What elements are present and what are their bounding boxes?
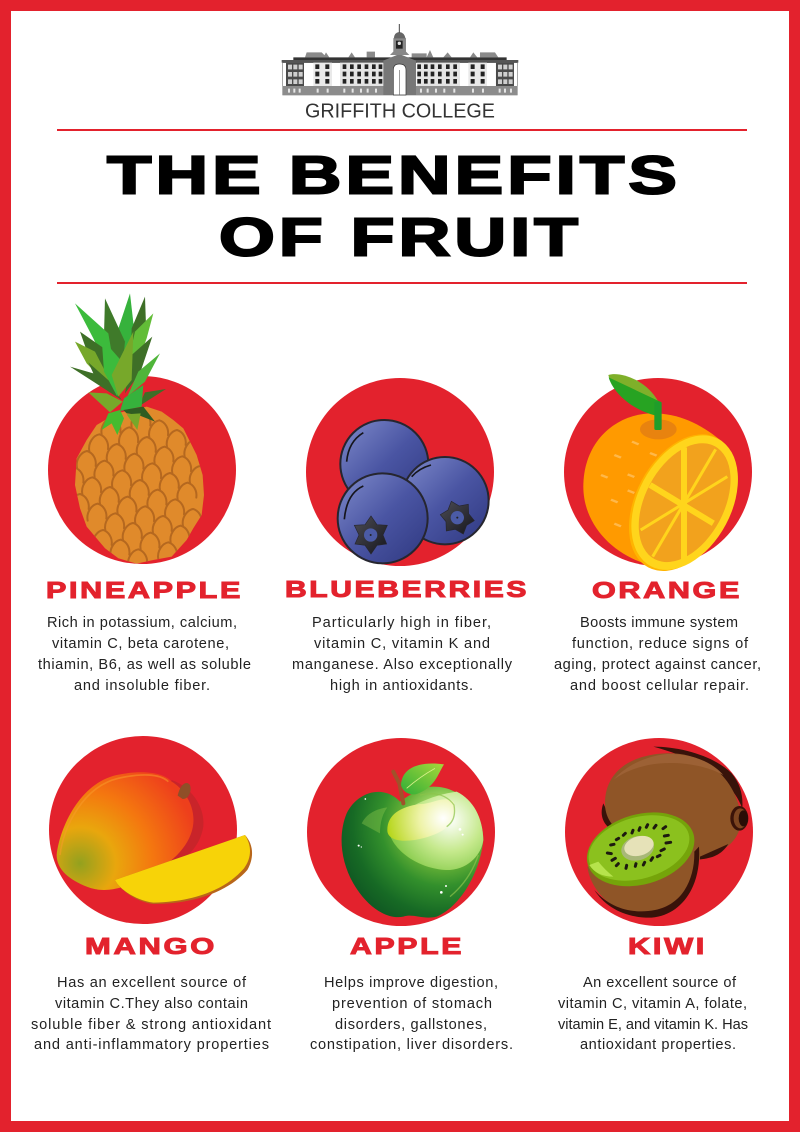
text: apple: prevention of stomach	[332, 996, 492, 1012]
bottom rule	[57, 282, 747, 284]
panel: blueberries	[306, 378, 494, 566]
panel: apple	[307, 738, 495, 926]
text: orange: Boosts immune system	[580, 615, 738, 631]
title: THE BENEFITS	[107, 146, 681, 206]
text: mango: Has an excellent source of	[57, 975, 247, 991]
red circle: orange	[564, 378, 752, 566]
text: orange: function, reduce signs of	[572, 636, 749, 652]
red circle: apple	[307, 738, 495, 926]
text: orange: aging, protect against cancer,	[554, 657, 761, 673]
text: pineapple: and insoluble fiber.	[74, 678, 210, 694]
text: kiwi: An excellent source of	[583, 975, 737, 991]
red circle: pineapple	[48, 376, 236, 564]
title	[107, 146, 681, 268]
text: apple: constipation, liver disorders.	[310, 1037, 513, 1053]
panel: mango	[49, 736, 252, 924]
logo: Griffith College	[282, 24, 518, 123]
icon: mango	[57, 772, 252, 904]
red circle: mango	[49, 736, 237, 924]
text: blueberries	[292, 615, 513, 694]
text: blueberries: high in antioxidants.	[330, 678, 473, 694]
text: mango	[31, 975, 271, 1053]
text: apple: Helps improve digestion,	[324, 975, 498, 991]
icon: college building	[282, 24, 518, 95]
text: pineapple	[38, 615, 251, 694]
text: apple	[310, 975, 513, 1053]
panel: kiwi	[565, 738, 753, 926]
heading: mango: MANGO	[85, 933, 217, 959]
heading: kiwi: KIWI	[628, 933, 707, 959]
text: kiwi: antioxidant properties.	[580, 1037, 736, 1053]
text: mango: and anti-inflammatory properties	[34, 1037, 269, 1053]
text: blueberries: vitamin C, vitamin K and	[314, 636, 490, 652]
text: kiwi	[558, 975, 748, 1053]
title: OF FRUIT	[219, 208, 582, 268]
text: blueberries: Particularly high in fiber,	[312, 615, 491, 631]
panel: pineapple	[48, 293, 236, 566]
panel: orange	[564, 374, 760, 589]
text: orange	[554, 615, 761, 694]
heading: orange: ORANGE	[592, 577, 742, 603]
icon: blueberries	[338, 420, 489, 563]
text: pineapple: Rich in potassium, calcium,	[47, 615, 237, 631]
red circle: kiwi	[565, 738, 753, 926]
heading: apple: APPLE	[350, 933, 464, 959]
text: kiwi: vitamin C, vitamin A, folate,	[558, 996, 747, 1012]
heading: blueberries: BLUEBERRIES	[285, 576, 529, 602]
icon: apple	[342, 763, 483, 918]
icon: orange	[583, 374, 760, 589]
text: pineapple: thiamin, B6, as well as soluble	[38, 657, 251, 673]
top rule	[57, 129, 747, 131]
text: orange: and boost cellular repair.	[570, 678, 749, 694]
icon: pineapple	[64, 293, 209, 566]
heading: pineapple: PINEAPPLE	[46, 577, 243, 603]
text: kiwi: vitamin E, and vitamin K. Has	[558, 1017, 748, 1033]
text: mango: soluble fiber & strong antioxidant	[31, 1017, 271, 1033]
icon: kiwi	[578, 747, 748, 918]
logo wordmark: GRIFFITH COLLEGE	[305, 100, 495, 122]
text: apple: disorders, gallstones,	[335, 1017, 487, 1033]
text: mango: vitamin C.They also contain	[55, 996, 248, 1012]
red circle: blueberries	[306, 378, 494, 566]
text: blueberries: manganese. Also exceptionally	[292, 657, 513, 673]
text: pineapple: vitamin C, beta carotene,	[52, 636, 229, 652]
